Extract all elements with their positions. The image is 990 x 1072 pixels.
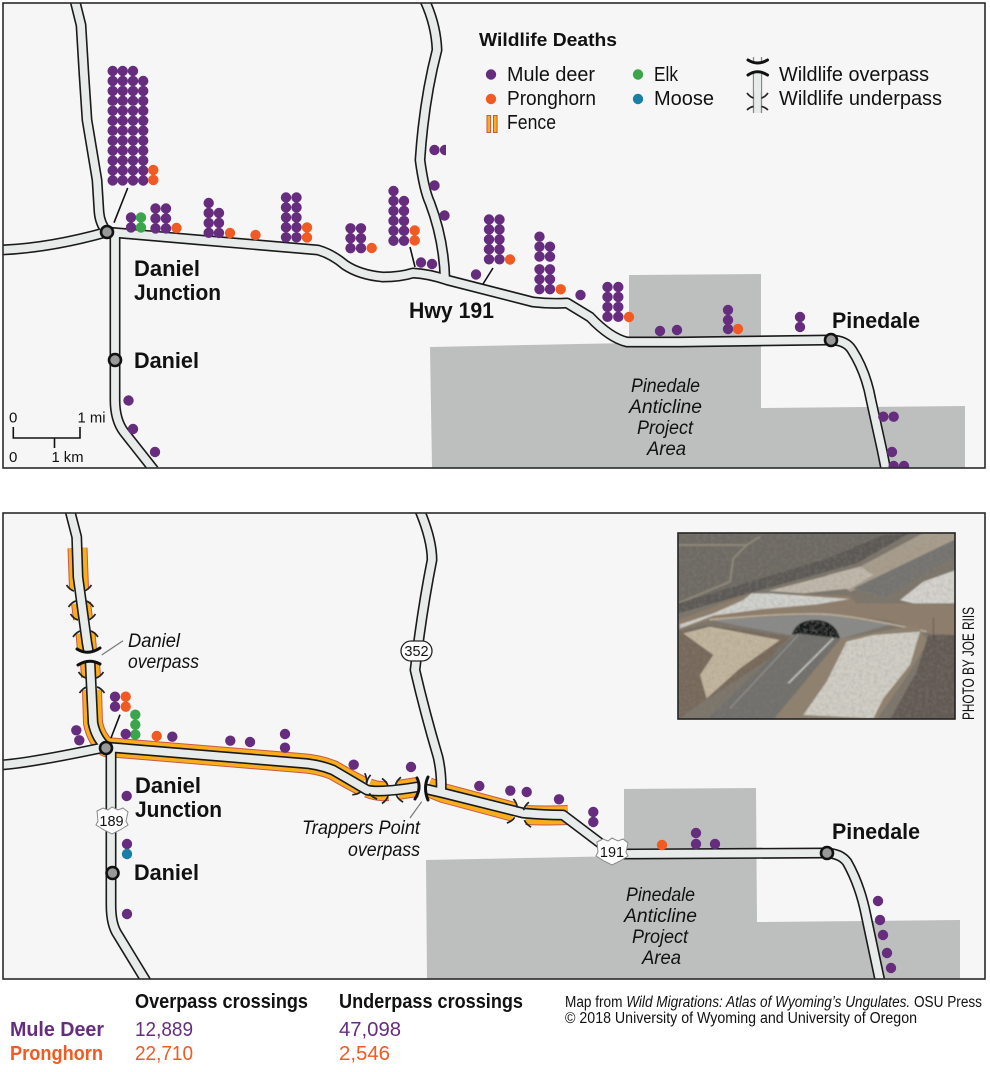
highway shield 189 (96, 807, 128, 834)
Trappers Point overpass crossing (415, 777, 428, 800)
legend (479, 29, 942, 134)
Pinedale Anticline area, top map (430, 274, 965, 468)
junction marker: Daniel (109, 354, 121, 366)
label: Daniel overpass: Daniel (128, 630, 181, 652)
legend: moose: Moose (654, 88, 714, 110)
row: mule deer: Mule Deer (10, 1019, 104, 1041)
label: Pinedale Anticline Project Area: Area (646, 438, 686, 460)
row: mule deer (10, 1019, 401, 1041)
scale bar: 0 (9, 449, 17, 466)
label: Pinedale Anticline Project Area: Project (632, 926, 689, 948)
leader lines, top map (114, 188, 493, 284)
legend: fence (487, 112, 556, 134)
scale bar: 1 km (52, 449, 84, 466)
label: Trappers Point overpass: overpass (348, 839, 420, 861)
leader lines, bottom map (102, 641, 422, 818)
label: Daniel Junction: Junction (134, 280, 221, 305)
photo credit: PHOTO BY JOE RIIS (959, 607, 978, 720)
underpass ticks, north road (66, 585, 104, 693)
label: Daniel: Daniel (134, 860, 199, 885)
label: Pinedale Anticline Project Area: Area (641, 947, 681, 969)
source credit (565, 994, 982, 1027)
death cluster 7 (394, 191, 437, 269)
deaths south of Daniel Junction (122, 791, 132, 919)
label: Pinedale Anticline Project Area: Pinedale (631, 375, 700, 397)
label: Pinedale Anticline Project Area: Anticline (623, 905, 697, 927)
legend heading: Wildlife Deaths (479, 29, 617, 50)
row: pronghorn: 2,546 (339, 1043, 390, 1065)
row: mule deer: 47,098 (339, 1019, 401, 1041)
label: Pinedale Anticline Project Area (623, 884, 697, 969)
death cluster 10 (608, 287, 634, 322)
panel: top map, wildlife deaths (1, 1, 985, 471)
label: Daniel Junction (135, 773, 222, 822)
junction marker: Pinedale (825, 334, 837, 346)
junction marker: Pinedale (821, 847, 833, 859)
deaths along highway 191 (225, 729, 720, 850)
legend: fence: Fence (507, 112, 556, 134)
deaths south of Daniel (123, 395, 160, 457)
row: pronghorn (10, 1043, 390, 1065)
label: Daniel overpass (128, 630, 199, 673)
column heading: underpass: Underpass crossings (339, 991, 523, 1013)
source credit: © 2018 University of Wyoming and University of Oregon (565, 1010, 917, 1027)
road network, bottom map (1, 511, 880, 981)
legend: elk (633, 64, 679, 86)
row: mule deer: 12,889 (135, 1019, 193, 1041)
deaths south of Pinedale (878, 412, 909, 471)
legend: elk: Elk (654, 64, 679, 86)
junction marker: Daniel (106, 867, 118, 879)
legend: mule deer: Mule deer (507, 64, 595, 86)
label: Daniel Junction (134, 256, 221, 305)
scale bar: 0 (9, 410, 17, 426)
label: Pinedale Anticline Project Area: Anticline (628, 396, 702, 418)
label: Daniel overpass: overpass (128, 651, 199, 673)
label: Daniel Junction: Daniel (135, 773, 201, 798)
panel: bottom map, after crossings (1, 511, 985, 981)
death cluster 2 (131, 218, 141, 228)
label: Pinedale: Pinedale (832, 819, 920, 844)
source credit: Map from Wild Migrations: Atlas of Wyoming’s Ungulates. OSU Press (565, 994, 982, 1011)
label: Pinedale Anticline Project Area: Project (637, 417, 694, 439)
underpass ticks, highway 191 (352, 773, 531, 828)
Daniel overpass crossing (77, 648, 100, 665)
crossings table (10, 991, 523, 1065)
legend: wildlife underpass: Wildlife underpass (779, 88, 942, 110)
label: Hwy 191: Hwy 191 (409, 298, 494, 323)
death cluster 6 (350, 228, 377, 253)
label: Daniel Junction: Junction (135, 797, 222, 822)
highway shield 191: 191 (600, 845, 624, 861)
label: Daniel: Daniel (134, 348, 199, 373)
deaths south of Pinedale (873, 896, 896, 973)
deaths near Daniel Junction (71, 697, 178, 746)
column heading: overpass: Overpass crossings (135, 991, 308, 1013)
row: pronghorn: Pronghorn (10, 1043, 103, 1065)
legend: wildlife overpass (748, 57, 929, 92)
label: Pinedale: Pinedale (832, 308, 920, 333)
highway shield 189: 189 (99, 814, 124, 830)
death cluster 3 (156, 208, 182, 233)
highway shield 352 (401, 641, 432, 661)
road network, top map (1, 1, 886, 470)
death cluster 9 (540, 237, 586, 300)
death cluster 5 (286, 198, 307, 238)
scale bar: 1 mi (78, 410, 106, 426)
legend: wildlife overpass: Wildlife overpass (779, 64, 929, 86)
label: Pinedale Anticline Project Area (628, 375, 702, 460)
photo: wildlife overpass over highway (678, 533, 956, 720)
death cluster 4 (209, 203, 261, 240)
death cluster: Daniel Junction large stack (113, 71, 153, 181)
scale bar (9, 410, 106, 466)
legend: pronghorn: Pronghorn (507, 88, 596, 110)
label: Pinedale Anticline Project Area: Pinedale (626, 884, 695, 906)
label: Trappers Point overpass: Trappers Point (302, 817, 421, 839)
row: pronghorn: 22,710 (135, 1043, 193, 1065)
label: Daniel Junction: Daniel (134, 256, 200, 281)
highway shield 352: 352 (404, 644, 429, 660)
junction marker: Daniel Junction (100, 742, 112, 754)
highway shield 191 (596, 838, 628, 865)
fence segments (78, 548, 568, 816)
deaths along northern road (429, 145, 450, 221)
death cluster 8 (471, 220, 515, 280)
junction marker: Daniel Junction (101, 226, 113, 238)
deaths east of cluster 10 (655, 305, 805, 336)
label: Trappers Point overpass (302, 817, 421, 861)
Pinedale Anticline area, bottom map (426, 788, 960, 979)
